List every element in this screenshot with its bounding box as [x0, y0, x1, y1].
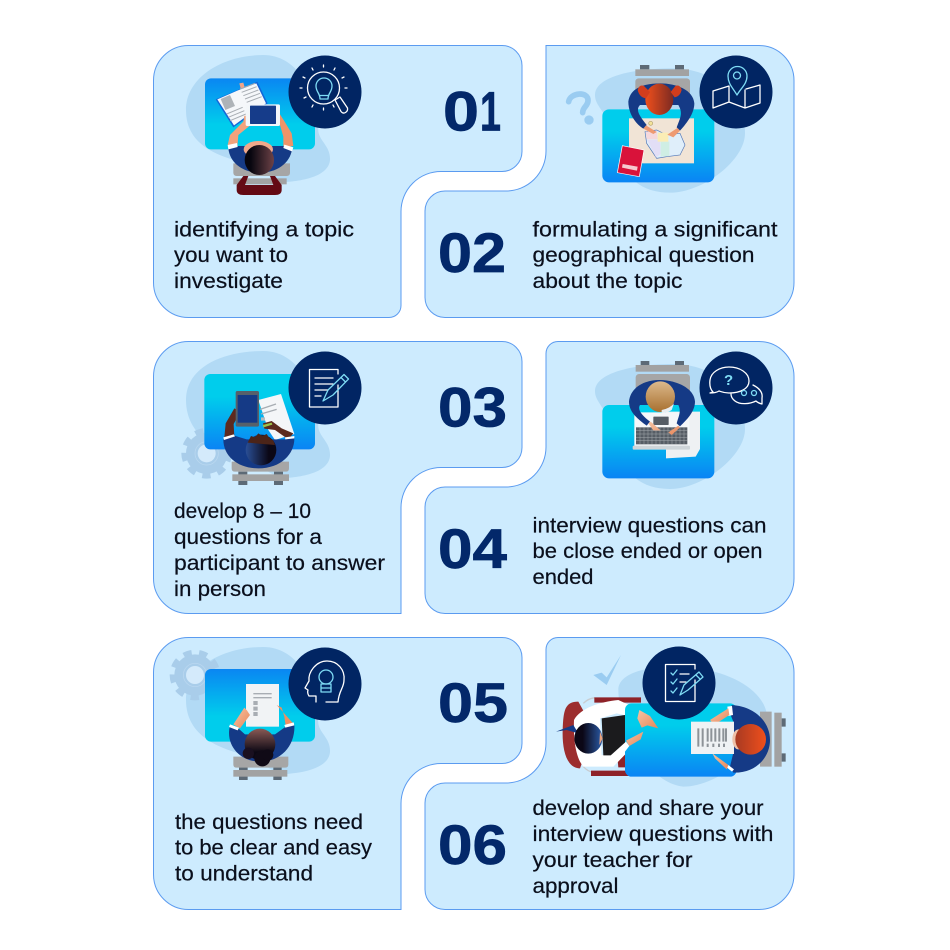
panel: step 06	[425, 638, 794, 910]
text: step 03	[174, 500, 385, 601]
illustration: student and teacher across a desk	[556, 655, 786, 787]
text: step 06	[532, 797, 774, 898]
panel: step 05	[154, 638, 522, 910]
text: step 03: develop 8 – 10	[174, 500, 311, 523]
text: step 05: the questions need	[175, 811, 363, 834]
icon: document and pencil	[288, 352, 362, 424]
number 02: 02	[438, 221, 506, 284]
text: step 01: identifying a topic	[174, 218, 354, 242]
number 01: 0	[443, 80, 479, 142]
number 05: 05	[438, 671, 508, 734]
text: step 02: formulating a significant	[532, 218, 778, 242]
number 06: 06	[438, 813, 507, 876]
text: step 02	[532, 218, 778, 293]
icon: speech bubbles with question: ?	[724, 372, 733, 389]
illustration: person at a laptop	[595, 361, 745, 489]
text: step 01: investigate	[174, 270, 283, 293]
icon: head with light bulb	[288, 648, 362, 720]
text: step 01: you want to	[174, 244, 288, 267]
panel: step 02	[425, 46, 794, 318]
number 01	[443, 80, 501, 142]
illustration: person studying a map	[569, 65, 745, 193]
text: step 03: in person	[174, 578, 266, 601]
icon: gear	[172, 652, 218, 698]
icon: map with pin	[700, 56, 772, 128]
text: step 04: interview questions can	[532, 514, 766, 538]
illustration: person reading a sheet	[172, 647, 330, 780]
icon: checklist and pencil	[642, 646, 716, 720]
panel: step 03	[154, 342, 522, 614]
text: step 05: to understand	[175, 862, 313, 886]
text: step 04: ended	[532, 566, 594, 589]
text: step 05	[175, 811, 373, 886]
text: step 02: geographical question	[532, 244, 754, 267]
text: step 04: be close ended or open	[532, 540, 762, 563]
icon: gear	[184, 431, 229, 476]
icon: light bulb under magnifier	[288, 56, 362, 128]
number 04: 04	[438, 517, 507, 580]
number 01: 1	[480, 80, 501, 142]
panel: step 04	[425, 342, 794, 614]
icon: speech bubbles with question	[700, 352, 772, 424]
illustration: person with tablet and paper	[184, 351, 330, 485]
text: step 06: interview questions with	[532, 823, 774, 846]
text: step 01	[174, 218, 354, 293]
text: step 05: to be clear and easy	[175, 836, 373, 860]
icon: check mark	[593, 655, 621, 685]
text: step 03: participant to answer	[174, 552, 385, 575]
illustration: person reading a book and tablet	[186, 55, 330, 195]
text: step 02: about the topic	[532, 270, 682, 293]
panel: step 01	[154, 46, 522, 318]
text: step 06: your teacher for	[532, 849, 693, 872]
text: step 06: develop and share your	[532, 797, 764, 820]
number 03: 03	[438, 376, 507, 438]
text: step 06: approval	[532, 875, 618, 898]
icon: question mark	[569, 94, 594, 125]
text: step 03: questions for a	[174, 526, 322, 549]
text: step 04	[532, 514, 766, 589]
